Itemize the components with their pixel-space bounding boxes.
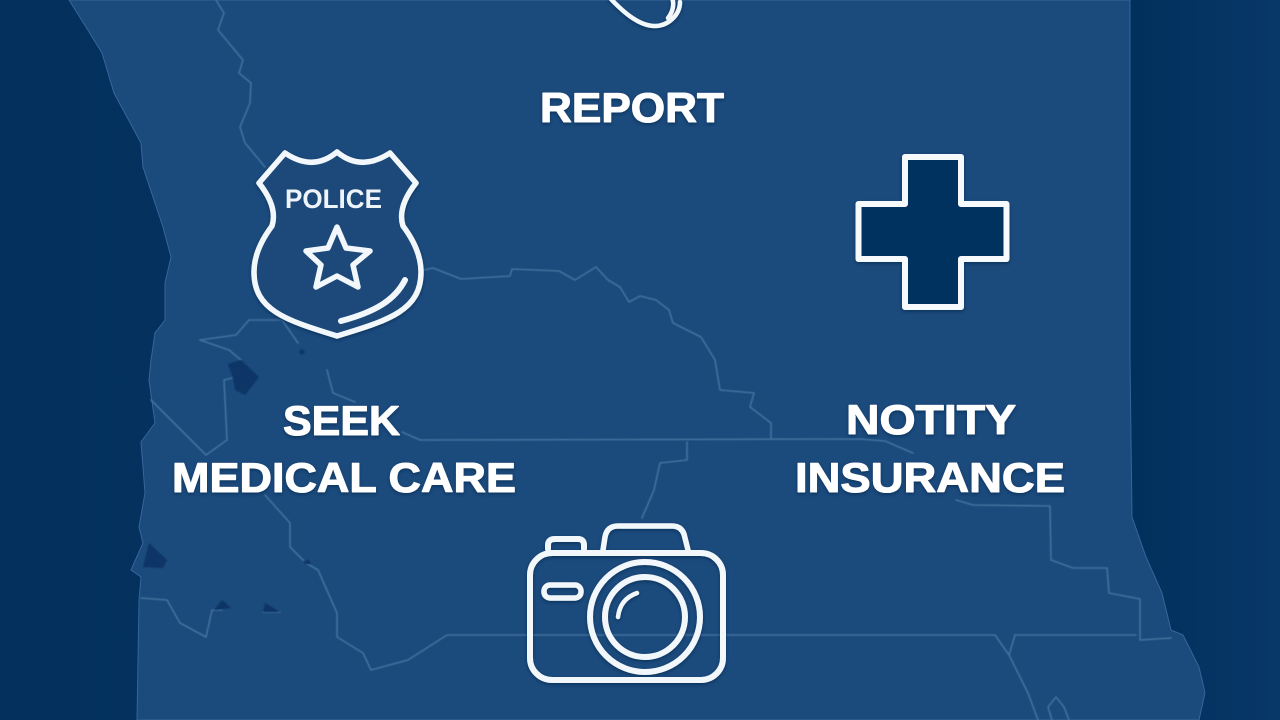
label line: seek: SEEK: [283, 397, 400, 444]
camera lens inner: [605, 577, 685, 657]
camera lens highlight: [618, 593, 637, 617]
label line: medical care: MEDICAL CARE: [172, 454, 516, 501]
map lakes: [143, 350, 311, 612]
badge outline: [254, 152, 421, 336]
label line: notity: NOTITY: [846, 396, 1016, 443]
camera lens outer: [590, 562, 700, 672]
icon: phone (cropped at top): [610, 0, 680, 26]
icon: police badge: [254, 152, 421, 336]
camera viewfinder: [603, 526, 688, 550]
camera flash window: [544, 585, 581, 598]
label: notify insurance: [795, 396, 1065, 501]
icon: medical cross: [858, 157, 1006, 307]
icon: camera: [530, 526, 723, 680]
heading: report: REPORT: [540, 84, 724, 131]
camera body: [530, 553, 723, 680]
badge star: [306, 227, 370, 287]
label: seek medical care: [172, 397, 516, 501]
camera shutter button: [548, 539, 584, 549]
label line: insurance: INSURANCE: [795, 454, 1065, 501]
badge text: POLICE: [285, 184, 382, 214]
badge swoosh: [341, 280, 405, 321]
